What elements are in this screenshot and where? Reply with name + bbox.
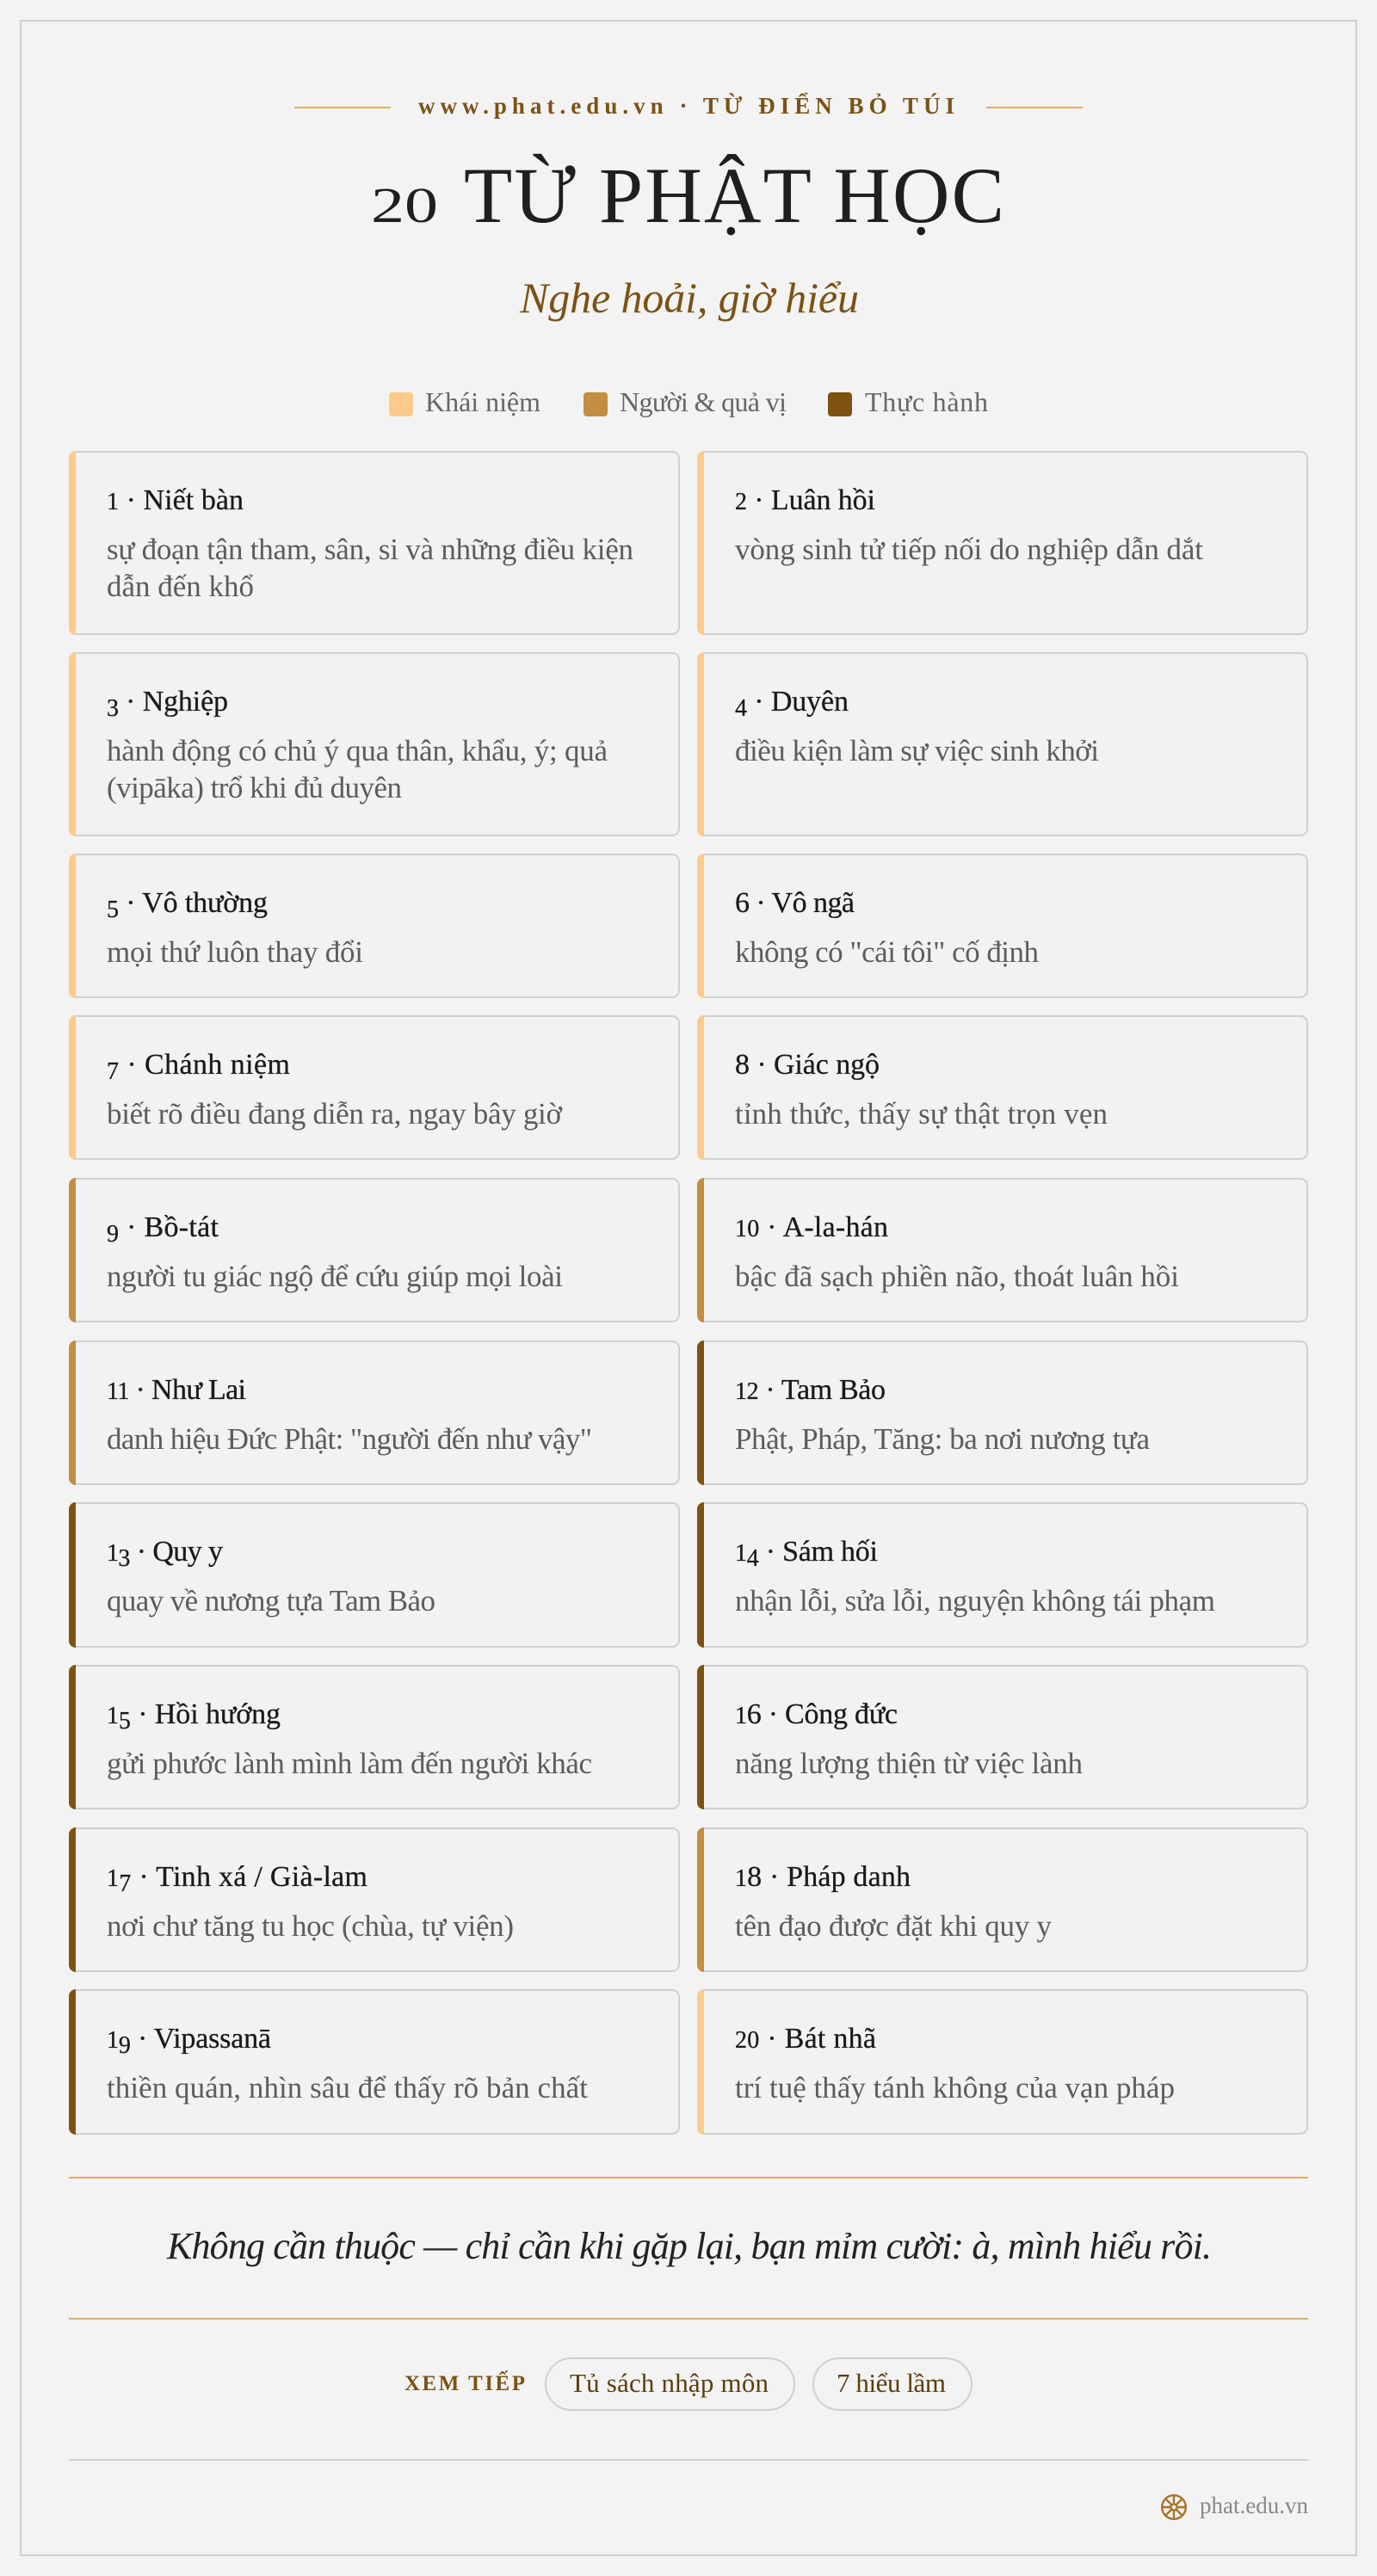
- term 17: 1: [107, 1865, 119, 1892]
- card 9: [69, 1178, 679, 1322]
- definition 17: nơi chư tăng tu học (chùa, tự viện): [107, 1909, 514, 1943]
- definition 18: tên đạo được đặt khi quy y: [735, 1909, 1052, 1943]
- definition 5: mọi thứ luôn thay đổi: [107, 935, 363, 969]
- title: 20: [371, 177, 438, 233]
- term 3: · Nghiệp: [119, 686, 228, 718]
- definition 3 second line: (vipāka) trổ khi đủ duyên: [107, 771, 402, 804]
- term 5: 5: [107, 897, 119, 923]
- card 12: [697, 1340, 1307, 1485]
- see more row: [404, 2358, 972, 2410]
- term 17: 7: [119, 1870, 131, 1897]
- term 14: 1: [735, 1540, 747, 1567]
- term 14: 4: [747, 1545, 759, 1572]
- kicker line right: [986, 107, 1083, 108]
- term 13: 1: [107, 1540, 119, 1567]
- card 14: [697, 1502, 1307, 1648]
- pill: 7 hiểu lầm: [813, 2358, 972, 2410]
- term 16: 16 · Công đức: [735, 1698, 898, 1730]
- card 1: [69, 451, 679, 635]
- legend label: người và quả vị: Người & quả vị: [620, 386, 787, 417]
- card 6: [697, 854, 1307, 998]
- definition 11: danh hiệu Đức Phật: "người đến như vậy": [107, 1422, 592, 1456]
- term 17: · Tinh xá / Già-lam: [132, 1861, 367, 1893]
- pill: tủ sách nhập môn: [546, 2358, 794, 2410]
- definition 2: vòng sinh tử tiếp nối do nghiệp dẫn dắt: [735, 533, 1203, 566]
- footer site name: phat.edu.vn: [1200, 2493, 1308, 2518]
- pill: tủ sách nhập môn: Tủ sách nhập môn: [570, 2368, 769, 2398]
- term 20: 20 · Bát nhã: [735, 2023, 876, 2055]
- term 4: 4: [735, 695, 747, 722]
- definition 10: bậc đã sạch phiền não, thoát luân hồi: [735, 1260, 1179, 1293]
- term 1: 1 · Niết bàn: [107, 484, 244, 516]
- card 15: [69, 1665, 679, 1809]
- term 5: · Vô thường: [119, 887, 268, 919]
- term 11: 11 · Như Lai: [107, 1374, 246, 1406]
- term 9: 9: [107, 1221, 119, 1248]
- term 6: 6 · Vô ngã: [735, 887, 855, 919]
- card 5: [69, 854, 679, 998]
- term 13: · Quy y: [130, 1536, 223, 1568]
- card 11: [69, 1340, 679, 1485]
- legend: [389, 386, 988, 417]
- definition 16: năng lượng thiện từ việc lành: [735, 1747, 1083, 1780]
- closing quote: Không cần thuộc — chỉ cần khi gặp lại, bạn mỉm cười: à, mình hiểu rồi.: [166, 2225, 1212, 2267]
- title: TỪ PHẬT HỌC: [464, 151, 1004, 239]
- definition 13: quay về nương tựa Tam Bảo: [107, 1584, 435, 1618]
- legend swatch: thực hành: [828, 392, 852, 416]
- card 4: [697, 652, 1307, 836]
- term 9: · Bồ-tát: [119, 1211, 219, 1243]
- definition 7: biết rõ điều đang diễn ra, ngay bây giờ: [107, 1097, 562, 1131]
- term 13: 3: [118, 1545, 130, 1572]
- definition 3: hành động có chủ ý qua thân, khẩu, ý; quả: [107, 734, 608, 767]
- definition 4: điều kiện làm sự việc sinh khởi: [735, 734, 1099, 767]
- definition 19: thiền quán, nhìn sâu để thấy rõ bản chất: [107, 2071, 588, 2105]
- term 19: 9: [119, 2032, 131, 2059]
- legend swatch: người và quả vị: [584, 392, 608, 416]
- term 14: · Sám hối: [759, 1536, 878, 1568]
- term 4: · Duyên: [747, 686, 849, 718]
- card 8: [697, 1015, 1307, 1160]
- see more label: XEM TIẾP: [404, 2370, 525, 2395]
- legend label: khái niệm: Khái niệm: [425, 386, 540, 417]
- card 17: [69, 1827, 679, 1972]
- term 19: 1: [107, 2027, 119, 2054]
- term 7: · Chánh niệm: [119, 1049, 290, 1081]
- card 13: [69, 1502, 679, 1648]
- term 18: 18 · Pháp danh: [735, 1861, 911, 1893]
- definition 1: sự đoạn tận tham, sân, si và những điều kiện: [107, 533, 633, 566]
- definition 14: nhận lỗi, sửa lỗi, nguyện không tái phạm: [735, 1584, 1215, 1618]
- card 10: [697, 1178, 1307, 1322]
- card 3: [69, 652, 679, 836]
- card 19: [69, 1989, 679, 2135]
- card 2: [697, 451, 1307, 635]
- definition 15: gửi phước lành mình làm đến người khác: [107, 1747, 592, 1780]
- definition 12: Phật, Pháp, Tăng: ba nơi nương tựa: [735, 1422, 1150, 1456]
- definition 1 second line: dẫn đến khổ: [107, 570, 254, 603]
- term 7: 7: [107, 1058, 119, 1085]
- term 10: 10 · A-la-hán: [735, 1211, 888, 1243]
- term 15: 5: [119, 1708, 131, 1735]
- card 18: [697, 1827, 1307, 1972]
- card 20: [697, 1989, 1307, 2135]
- pill: 7 hiểu lầm: 7 hiểu lầm: [837, 2368, 946, 2398]
- header: [294, 92, 1083, 322]
- icon: dharma wheel: [1162, 2495, 1186, 2519]
- card 7: [69, 1015, 679, 1160]
- term 3: 3: [107, 695, 119, 722]
- card 16: [697, 1665, 1307, 1809]
- term 15: · Hồi hướng: [131, 1698, 281, 1730]
- legend label: thực hành: Thực hành: [865, 386, 988, 417]
- term 8: 8 · Giác ngộ: [735, 1049, 880, 1081]
- term 12: 12 · Tam Bảo: [735, 1374, 886, 1406]
- kicker text: www.phat.edu.vn · TỪ ĐIỂN BỎ TÚI: [418, 92, 954, 119]
- term 2: 2 · Luân hồi: [735, 484, 875, 516]
- subtitle: Nghe hoải, giờ hiểu: [519, 274, 859, 322]
- definition 6: không có "cái tôi" cố định: [735, 935, 1040, 969]
- term 15: 1: [107, 1703, 119, 1729]
- footer brand: [1162, 2493, 1308, 2519]
- legend swatch: khái niệm: [389, 392, 413, 416]
- definition 20: trí tuệ thấy tánh không của vạn pháp: [735, 2071, 1175, 2105]
- definition 9: người tu giác ngộ để cứu giúp mọi loài: [107, 1260, 563, 1293]
- kicker line left: [294, 107, 391, 108]
- term 19: · Vipassanā: [131, 2023, 271, 2055]
- definition 8: tỉnh thức, thấy sự thật trọn vẹn: [735, 1097, 1108, 1131]
